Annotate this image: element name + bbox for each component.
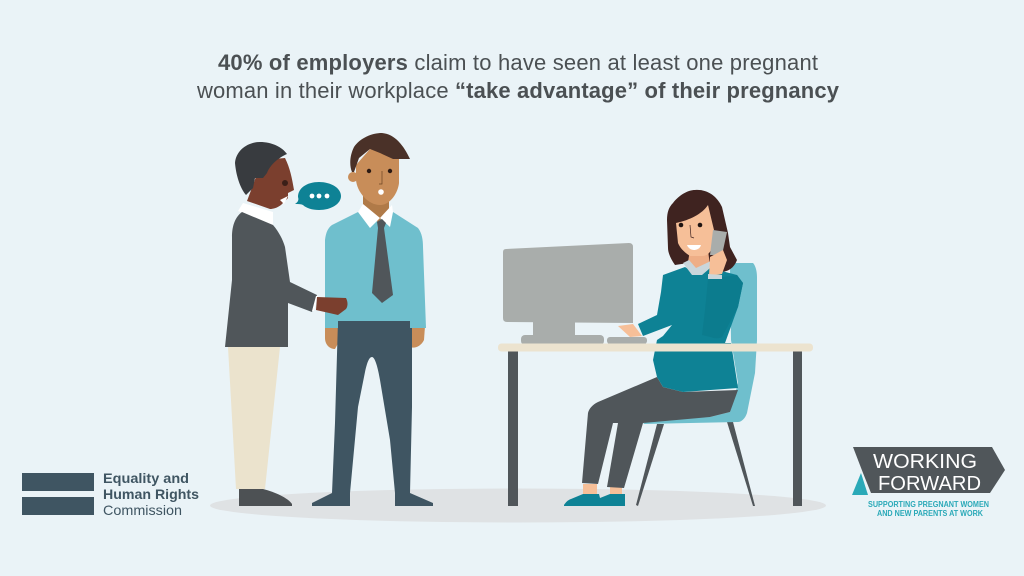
chair legs (636, 424, 664, 506)
nose (690, 225, 694, 238)
trousers: navy (312, 320, 433, 506)
logo: Working Forward: FORWARD (878, 473, 981, 495)
shirt (325, 212, 426, 328)
desk top (498, 344, 813, 352)
logo: Working Forward (852, 447, 1005, 518)
hands (325, 326, 341, 349)
mouth (378, 189, 384, 195)
logo: Working Forward: SUPPORTING PREGNANT WOMEN (868, 500, 989, 509)
neck (363, 195, 389, 222)
logo: Equality and Human Rights Commission (22, 470, 199, 518)
floor shadow (210, 488, 826, 522)
smile (687, 245, 701, 250)
chair (636, 263, 757, 506)
logo: Working Forward: AND NEW PARENTS AT WORK (877, 509, 983, 518)
shoe (239, 489, 292, 506)
face (676, 205, 714, 256)
monitor stand (533, 322, 575, 336)
logo: Equality and Human Rights Commission: Commission (103, 502, 182, 518)
shoes (564, 494, 625, 506)
cuff (708, 274, 722, 279)
title: 40% of employers claim to have seen at least one pregnant (218, 50, 818, 75)
collar (683, 260, 711, 275)
ankles (583, 484, 597, 495)
figure: man talking (225, 142, 348, 506)
hair (350, 133, 410, 172)
jacket (225, 212, 317, 347)
mouth (280, 196, 288, 204)
phone (710, 230, 727, 255)
computer (503, 243, 647, 345)
hand (316, 297, 348, 315)
speech bubble (295, 182, 341, 210)
ear (348, 172, 358, 182)
hair (667, 190, 737, 272)
eye (282, 180, 288, 186)
monitor base (521, 335, 604, 345)
title (196, 50, 840, 103)
collar (238, 203, 273, 225)
logo: Working Forward: WORKING (873, 451, 977, 473)
sweater arm (702, 275, 743, 338)
desk legs (508, 351, 802, 506)
eyes (367, 169, 371, 173)
chair shell (643, 263, 757, 424)
keyboard (607, 337, 647, 344)
sweater (638, 267, 743, 392)
tie (372, 219, 393, 303)
phone hand (709, 250, 727, 276)
collar (358, 204, 380, 228)
trousers: grey (582, 377, 738, 488)
desk hand (618, 324, 642, 337)
hair (235, 142, 287, 195)
eyes (679, 223, 683, 227)
neck and face (247, 158, 294, 209)
neck (688, 250, 710, 272)
monitor screen (503, 243, 633, 323)
cuff (312, 296, 318, 311)
logo: Equality and Human Rights Commission: Equality and (103, 470, 189, 486)
logo: Equality and Human Rights Commission: Human Rights (103, 486, 199, 502)
figure: woman on phone (564, 190, 743, 506)
nose (379, 171, 382, 184)
figure: man listening (312, 133, 433, 506)
face (356, 149, 399, 205)
trousers: beige (228, 347, 280, 489)
title: woman in their workplace “take advantage” of their pregnancy (196, 78, 840, 103)
